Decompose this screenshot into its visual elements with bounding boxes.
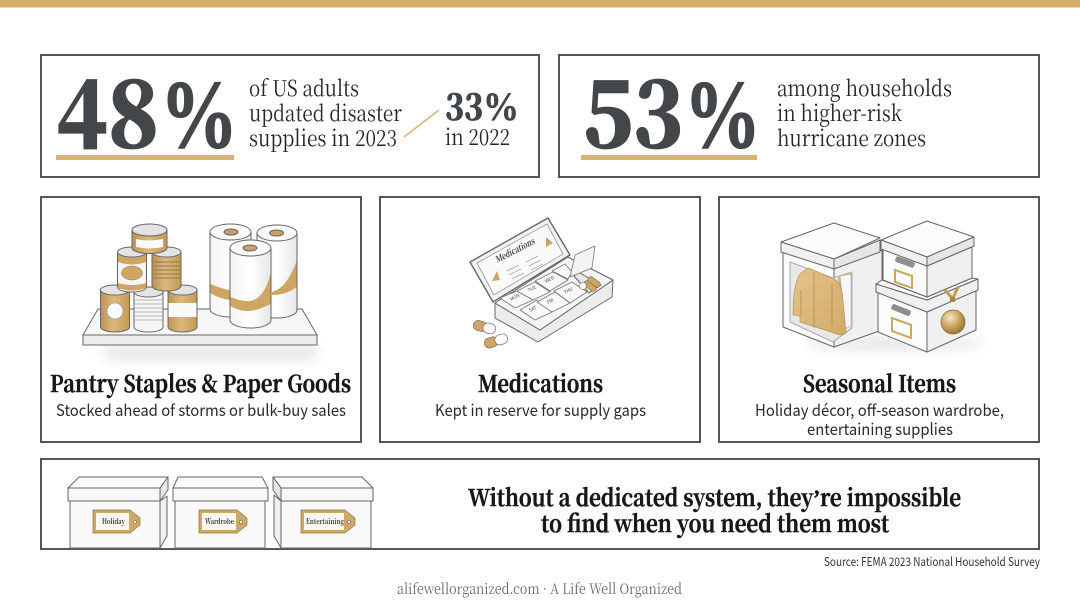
box body	[495, 280, 613, 342]
icon: shelf with cans and paper towels	[83, 224, 317, 360]
box: Holiday	[68, 477, 168, 548]
gold ornament	[941, 287, 965, 334]
heading: Pantry Staples & Paper Goods	[50, 366, 351, 399]
description text	[777, 72, 952, 153]
lid	[470, 218, 570, 302]
panel: 53 percent statistic	[559, 42, 1039, 177]
comparison 33% in 2022: in 2022	[445, 121, 510, 152]
panel: dedicated system callout	[41, 459, 1039, 549]
compartments	[500, 264, 587, 320]
gold underline	[581, 155, 757, 160]
box: Entertaining	[273, 477, 373, 548]
big number 53%	[583, 42, 761, 174]
can bottom left	[100, 285, 130, 332]
window with jacket	[790, 262, 852, 342]
description text: of US adults	[249, 72, 359, 103]
caption: Holiday décor, off-season wardrobe,	[755, 397, 1004, 421]
paper towel roll left	[210, 224, 251, 317]
loose capsules	[472, 319, 509, 349]
comparison 33% in 2022: %	[483, 84, 519, 129]
can bottom right	[168, 285, 197, 332]
icon: pill organizer: MON	[509, 293, 521, 303]
description text: among households	[777, 72, 952, 103]
tall box with window	[781, 223, 882, 347]
heading: Seasonal Items	[803, 366, 956, 399]
big number 48%: 48	[57, 42, 159, 174]
icon: pill organizer: TUE	[527, 284, 538, 294]
big number 48%	[57, 42, 238, 174]
panel: seasonal items	[719, 197, 1039, 442]
paper towel roll right	[257, 225, 297, 318]
callout text: Without a dedicated system, they’re impossible	[468, 480, 961, 513]
footer: alifewellorganized.com · A Life Well Organized	[397, 578, 682, 599]
open compartment with pills	[574, 272, 601, 293]
caption: Kept in reserve for supply gaps	[435, 397, 646, 421]
description text: updated disaster	[249, 97, 403, 128]
icon: pill organizer: THU	[563, 286, 574, 296]
caption	[755, 397, 1004, 440]
gold underline	[56, 155, 234, 160]
big number 53%: 53	[583, 42, 683, 174]
box: Entertaining: Entertaining	[306, 516, 344, 527]
icon: pill organizer: Medications	[492, 234, 538, 266]
icon: labelled boxes	[68, 477, 373, 548]
icon: pill organizer: WED	[544, 275, 556, 285]
top accent bar	[0, 0, 1080, 8]
icon: pill organizer	[470, 218, 613, 349]
paper towel roll front	[230, 240, 271, 328]
description text	[249, 72, 403, 153]
box: Wardrobe	[173, 477, 268, 548]
can bottom middle	[134, 287, 163, 332]
big number 48%: %	[160, 61, 238, 169]
box: Holiday: Holiday	[102, 516, 125, 527]
source note: Source: FEMA 2023 National Household Survey	[824, 553, 1041, 570]
heading: Medications	[478, 366, 603, 399]
panel: pantry staples and paper goods	[41, 197, 361, 442]
caption: entertaining supplies	[807, 416, 953, 440]
box: Wardrobe: Wardrobe	[205, 516, 235, 527]
lower right box	[876, 278, 978, 352]
icon: pill organizer: SAT	[528, 305, 538, 314]
callout text	[468, 480, 961, 539]
comparison 33% in 2022	[445, 77, 519, 152]
can middle left	[118, 247, 146, 292]
upper right box	[881, 221, 974, 297]
panel: 48 percent statistic	[41, 42, 539, 177]
caption: Stocked ahead of storms or bulk-buy sales	[56, 397, 346, 421]
description text: hurricane zones	[777, 122, 926, 153]
big number 53%: %	[684, 61, 761, 169]
icon: storage boxes	[781, 221, 985, 352]
gold divider line	[404, 110, 439, 137]
description text: in higher-risk	[777, 97, 903, 128]
can middle right	[152, 247, 181, 291]
icon: pill organizer: FRI	[546, 297, 555, 306]
panel: medications	[380, 197, 700, 442]
description text: supplies in 2023	[249, 122, 397, 153]
comparison 33% in 2022: 33	[445, 77, 483, 131]
can top	[132, 224, 167, 254]
callout text: to find when you need them most	[541, 506, 889, 539]
